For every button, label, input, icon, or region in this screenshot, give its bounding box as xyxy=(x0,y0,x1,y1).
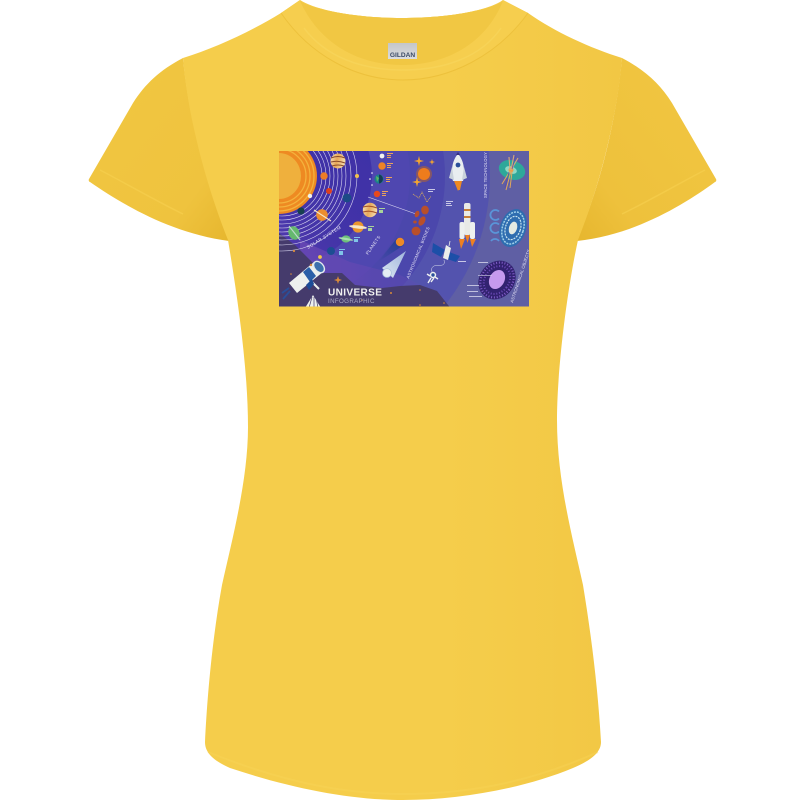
planet: green ringed xyxy=(338,235,354,243)
solar system planets xyxy=(286,154,359,242)
icon: star cluster xyxy=(412,156,435,187)
dark mound xyxy=(279,233,449,306)
icon: spiral galaxy xyxy=(499,209,527,247)
icon: rocket xyxy=(449,152,467,191)
inner back neck xyxy=(300,1,503,65)
mound stars xyxy=(290,250,445,306)
planet: striped xyxy=(363,203,377,217)
title: astronomical bodies: ASTRONOMICAL BODIES xyxy=(405,226,431,279)
icon: black hole accretion disc xyxy=(498,154,526,190)
planet: ringed green xyxy=(288,226,300,240)
icon: purple galaxy xyxy=(467,260,516,300)
icon: constellation xyxy=(413,192,431,202)
icon: telescope xyxy=(282,259,327,308)
icon: satellite xyxy=(432,241,466,262)
planet: ringed orange xyxy=(314,209,331,221)
astronomical bodies xyxy=(412,156,435,235)
left sleeve xyxy=(89,58,229,241)
icon: asteroids xyxy=(412,206,429,235)
title: solar system: SOLAR SYSTEM xyxy=(306,225,342,250)
collar xyxy=(281,0,528,80)
title: space technology: SPACE TECHNOLOGY xyxy=(483,152,488,198)
icon: ring gauges xyxy=(490,210,499,241)
title: universe infographic: INFOGRAPHIC xyxy=(328,298,375,305)
icon: launch rocket xyxy=(446,201,476,249)
orbits xyxy=(279,151,358,252)
planet: striped giant xyxy=(330,154,346,168)
icon: comet xyxy=(382,251,406,278)
icon: star xyxy=(416,166,432,182)
right sleeve xyxy=(577,58,716,241)
printed infographic xyxy=(279,151,529,306)
title: universe infographic xyxy=(328,288,382,303)
planet: saturn xyxy=(349,221,367,233)
planet: earth xyxy=(369,172,384,186)
icon: sun xyxy=(279,151,317,214)
neck label: GILDAN xyxy=(390,52,415,59)
title: planets: PLANETS xyxy=(365,235,382,256)
asteroid belt line xyxy=(368,197,416,214)
icon: meteor xyxy=(382,238,404,258)
title: universe infographic: UNIVERSE xyxy=(328,288,382,298)
title: astronomical objects: ASTRONOMICAL OBJECTS xyxy=(509,249,531,303)
planets column xyxy=(318,153,393,259)
tiny planet captions xyxy=(382,153,393,196)
icon: astronaut xyxy=(427,260,444,283)
shirt body xyxy=(183,0,622,800)
t-shirt xyxy=(89,0,716,800)
neck label xyxy=(388,43,417,59)
